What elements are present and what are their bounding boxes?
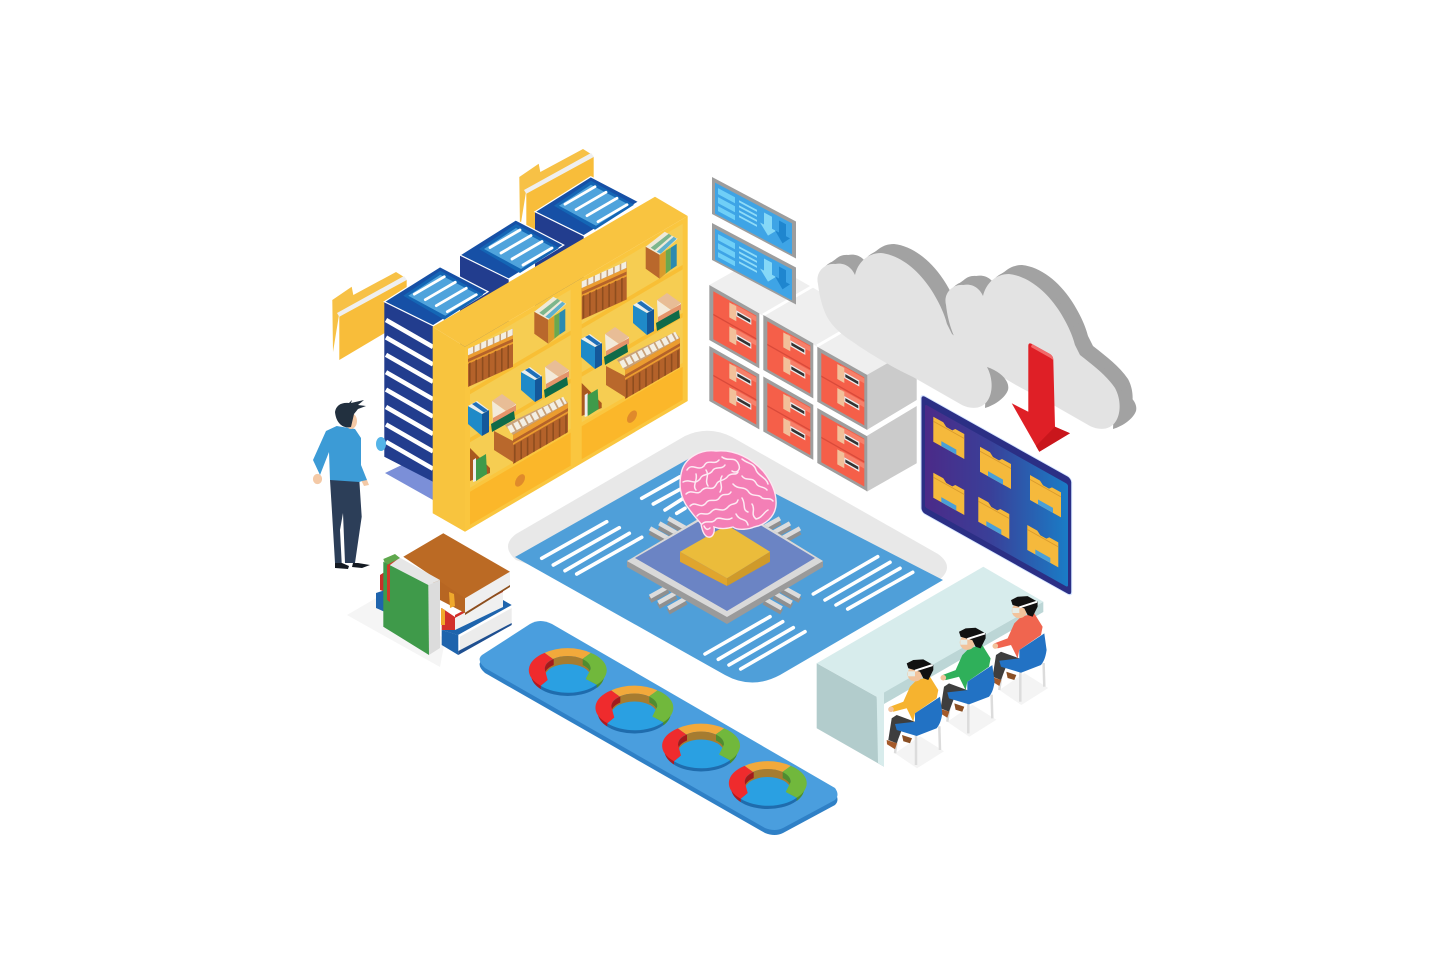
folder: left xyxy=(332,272,407,360)
chip pins xyxy=(650,518,800,612)
shelf side face xyxy=(433,327,465,532)
left book spines xyxy=(380,571,386,592)
hair xyxy=(335,400,366,427)
books: upright left xyxy=(534,297,566,344)
attendee: back, red shirt xyxy=(991,596,1048,705)
panel: lower xyxy=(712,223,796,305)
server rack: front xyxy=(384,267,488,482)
info panels xyxy=(712,177,796,305)
chip base xyxy=(627,502,823,624)
red book xyxy=(442,590,503,630)
gray platform xyxy=(508,431,947,660)
cells xyxy=(709,285,867,491)
panel: top xyxy=(712,177,796,259)
trousers xyxy=(330,480,362,563)
block top seams xyxy=(763,286,867,346)
cloud left: lower lobe side xyxy=(985,367,1008,408)
drawer server block xyxy=(709,257,917,492)
books: upright right xyxy=(646,232,678,279)
books: blue stack 1 xyxy=(521,360,569,402)
books: row top right xyxy=(582,261,627,320)
shelf top face xyxy=(433,197,688,347)
books: blue stack 2 xyxy=(468,394,516,436)
attendee: front, yellow shirt xyxy=(887,659,944,768)
tray top xyxy=(480,621,838,830)
brown book xyxy=(403,533,510,615)
floor shadow under rack xyxy=(385,462,433,500)
donut 4 xyxy=(729,761,807,809)
chip inner square xyxy=(635,505,815,611)
table apron xyxy=(884,602,1043,704)
hands xyxy=(313,474,369,486)
blue circuit board xyxy=(515,457,943,682)
block side xyxy=(867,347,917,492)
text lines on board xyxy=(542,477,913,669)
books: row lower right xyxy=(606,332,680,399)
blue disc behind rack xyxy=(376,437,386,451)
book stack xyxy=(347,533,512,667)
shelf front face xyxy=(465,216,688,532)
chip core xyxy=(680,552,727,586)
processor chip xyxy=(627,502,823,624)
clouds xyxy=(817,244,1136,429)
books: blue stack 4 xyxy=(581,327,629,369)
server rack: middle xyxy=(460,220,564,435)
folder: back right xyxy=(519,149,594,237)
tablet with folders xyxy=(921,394,1072,596)
floor shadow xyxy=(347,590,445,667)
cloud left: extrusion xyxy=(821,244,1005,405)
cloud left: face xyxy=(817,253,992,408)
books: green right xyxy=(582,383,602,417)
brain xyxy=(680,451,776,537)
books: green left xyxy=(470,448,490,482)
server rack: back xyxy=(535,177,639,392)
tray side xyxy=(480,626,838,835)
table top xyxy=(817,567,1043,697)
donut 3 xyxy=(662,724,740,772)
block top xyxy=(709,257,917,375)
head xyxy=(345,413,357,429)
person standing xyxy=(313,400,370,569)
table leg xyxy=(877,692,884,767)
donut 2 xyxy=(595,686,673,734)
books: row lower left xyxy=(494,397,568,464)
yellow ribbons xyxy=(441,592,455,625)
server racks xyxy=(384,177,639,500)
table end face xyxy=(817,663,884,767)
long table xyxy=(817,567,1043,767)
shoes xyxy=(335,563,370,569)
cloud right xyxy=(945,265,1136,429)
sweater xyxy=(313,426,367,482)
donut 1 xyxy=(529,648,607,696)
bookshelf xyxy=(433,197,688,532)
green book xyxy=(383,554,440,655)
books: blue stack 3 xyxy=(633,293,681,335)
red download arrow xyxy=(1012,343,1070,452)
attendee: middle, green shirt xyxy=(939,628,996,737)
blue book xyxy=(442,600,512,655)
chart tray with donuts xyxy=(480,621,838,835)
books: row top left xyxy=(468,329,513,387)
